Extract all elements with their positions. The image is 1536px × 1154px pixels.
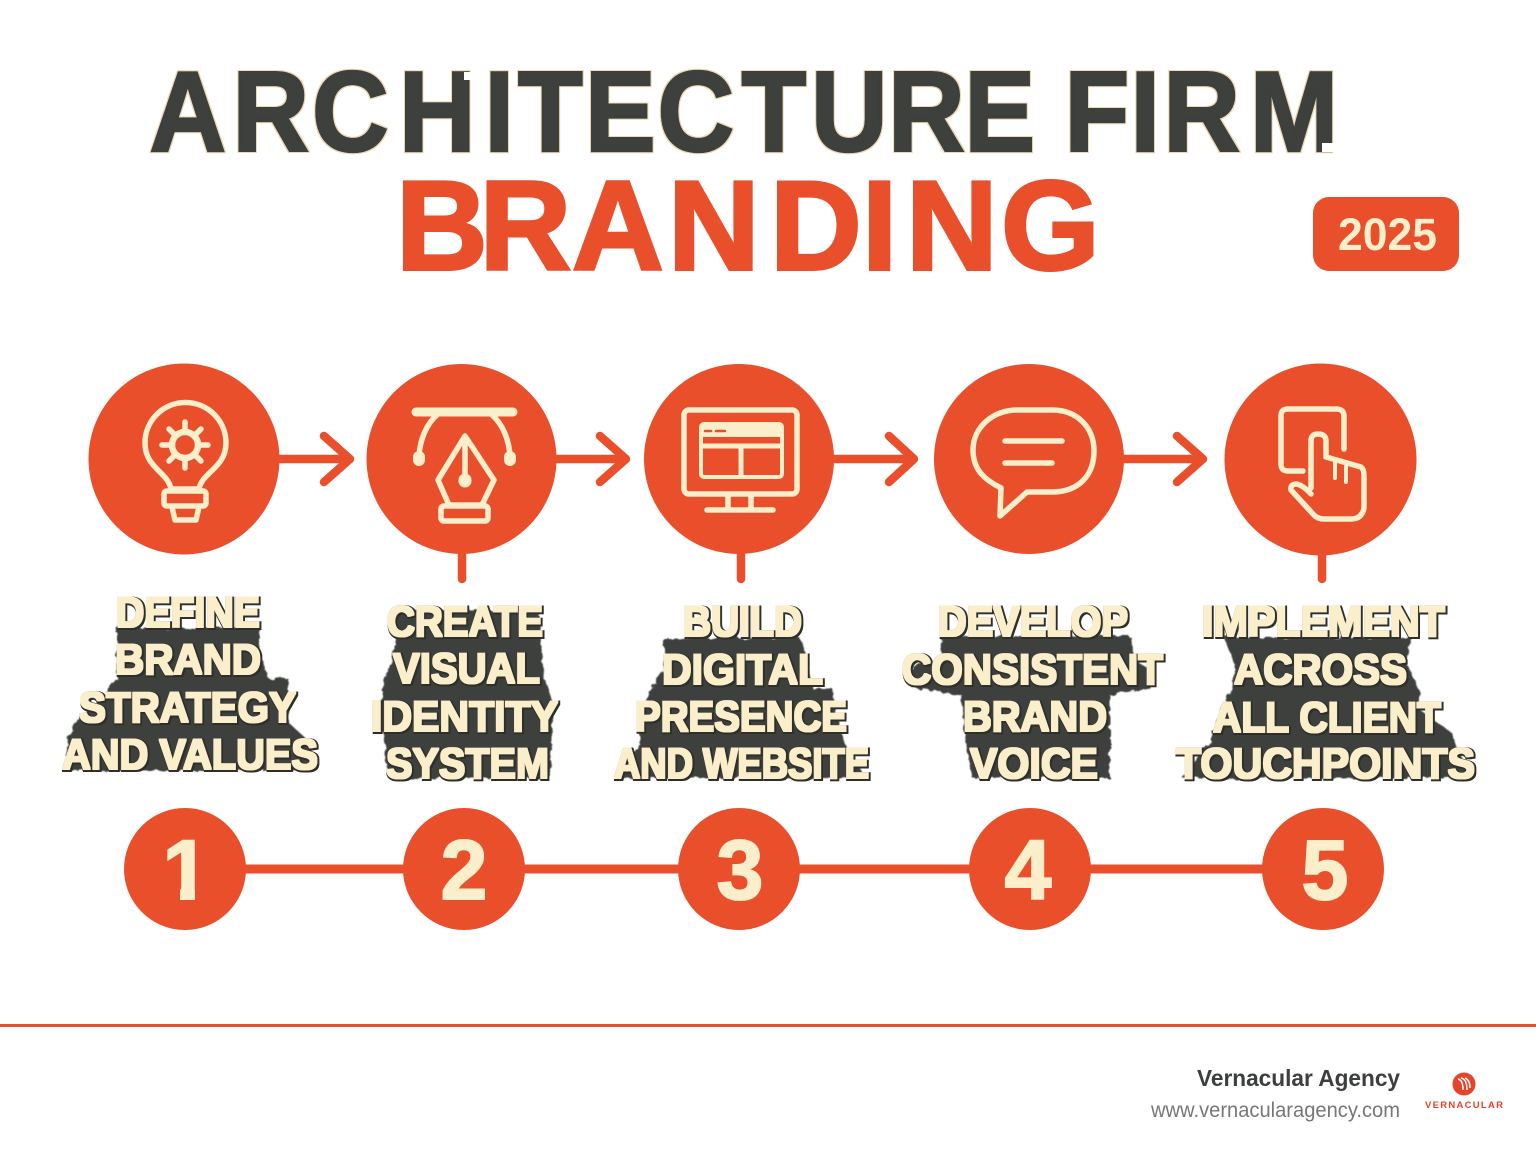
- number 1: 1: [163, 823, 209, 917]
- badge: 2025: [1313, 197, 1459, 271]
- step 1 label: DEFINE: [116, 589, 260, 637]
- step 4: develop consistent voice: [902, 364, 1163, 788]
- number 2: 2: [441, 823, 487, 917]
- step 4 label backdrop: [912, 636, 1150, 778]
- step 5 label backdrop: [1182, 637, 1470, 778]
- title: Architecture Firm: ARCHITECTURE: [150, 48, 1035, 176]
- arrow: step 2 to 3: [554, 436, 626, 482]
- logo: Vernacular: VERNACULAR: [1425, 1100, 1503, 1111]
- step 5 label: IMPLEMENT: [1202, 598, 1445, 646]
- arrow: step 4 to 5: [1123, 436, 1203, 482]
- step 5 label: TOUCHPOINTS: [1176, 740, 1475, 788]
- step 3: build digital presence: [614, 364, 869, 788]
- number 1: [124, 808, 246, 930]
- step 3 label: BUILD: [683, 598, 802, 646]
- step 4 label: [902, 598, 1163, 788]
- step 1: define brand strategy: [62, 364, 318, 779]
- title: Branding: BRANDING: [396, 154, 1100, 296]
- step 1 label: BRAND: [115, 636, 261, 684]
- step 2 label: [371, 598, 558, 788]
- number 3: [678, 808, 800, 930]
- step 3 circle: [644, 364, 834, 554]
- step 5: implement across touchpoints: [1176, 364, 1475, 788]
- title: Architecture Firm: FIRM: [1064, 48, 1338, 176]
- step 2 label: IDENTITY: [371, 693, 558, 741]
- step 4 label: VOICE: [970, 740, 1098, 788]
- step 2 stem: [458, 555, 466, 579]
- step 3 label: [614, 598, 869, 788]
- step 1 label: AND VALUES: [62, 731, 318, 779]
- step 1 circle: [88, 364, 280, 554]
- step 3 stem: [737, 555, 745, 579]
- number 5: [1262, 808, 1384, 930]
- icon: light bulb with gear: [145, 402, 226, 520]
- number 4: 4: [1005, 823, 1052, 917]
- number 5: 5: [1302, 823, 1348, 917]
- step 4 circle: [934, 364, 1124, 554]
- step 3 label: DIGITAL: [662, 646, 823, 694]
- step 5 circle: [1224, 364, 1416, 556]
- step 3 label: AND WEBSITE: [614, 740, 869, 788]
- step 1 label backdrop: [67, 628, 313, 770]
- step 5 label: ACROSS: [1234, 646, 1407, 694]
- step 5 label: ALL CLIENT: [1213, 694, 1441, 742]
- badge: 2025: 2025: [1338, 209, 1437, 260]
- number 2: [403, 808, 525, 930]
- step 4 label: BRAND: [963, 693, 1107, 741]
- icon: hand tapping device: [1281, 409, 1364, 519]
- footer rule: [0, 1024, 1536, 1027]
- number 4: [969, 808, 1091, 930]
- step 1 label: [62, 589, 318, 779]
- step 3 label: PRESENCE: [635, 693, 847, 741]
- footer: website: www.vernacularagency.com: [1150, 1099, 1400, 1122]
- step 2 label backdrop: [378, 610, 552, 778]
- number 3: 3: [717, 823, 763, 917]
- arrow: step 3 to 4: [832, 436, 914, 482]
- footer: agency name: Vernacular Agency: [1197, 1065, 1400, 1091]
- step 4 label: CONSISTENT: [902, 646, 1163, 694]
- step 5 stem: [1318, 555, 1326, 579]
- icon: speech bubble: [973, 410, 1094, 516]
- timeline connector: [185, 864, 1323, 874]
- logo: Vernacular: [1425, 1072, 1503, 1111]
- step 3 label backdrop: [622, 638, 866, 778]
- step 4 label: DEVELOP: [938, 598, 1128, 646]
- step 5 label: [1176, 598, 1475, 788]
- step 2 label: SYSTEM: [386, 740, 549, 788]
- step 2 label: VISUAL: [393, 645, 540, 693]
- icon: website on monitor: [684, 410, 797, 510]
- step 2: create visual identity: [366, 364, 558, 788]
- step 1 label: STRATEGY: [79, 684, 296, 732]
- step 2 circle: [366, 364, 556, 554]
- arrow: step 1 to 2: [278, 436, 350, 482]
- step 2 label: CREATE: [387, 598, 543, 646]
- icon: pen tool: [416, 412, 513, 521]
